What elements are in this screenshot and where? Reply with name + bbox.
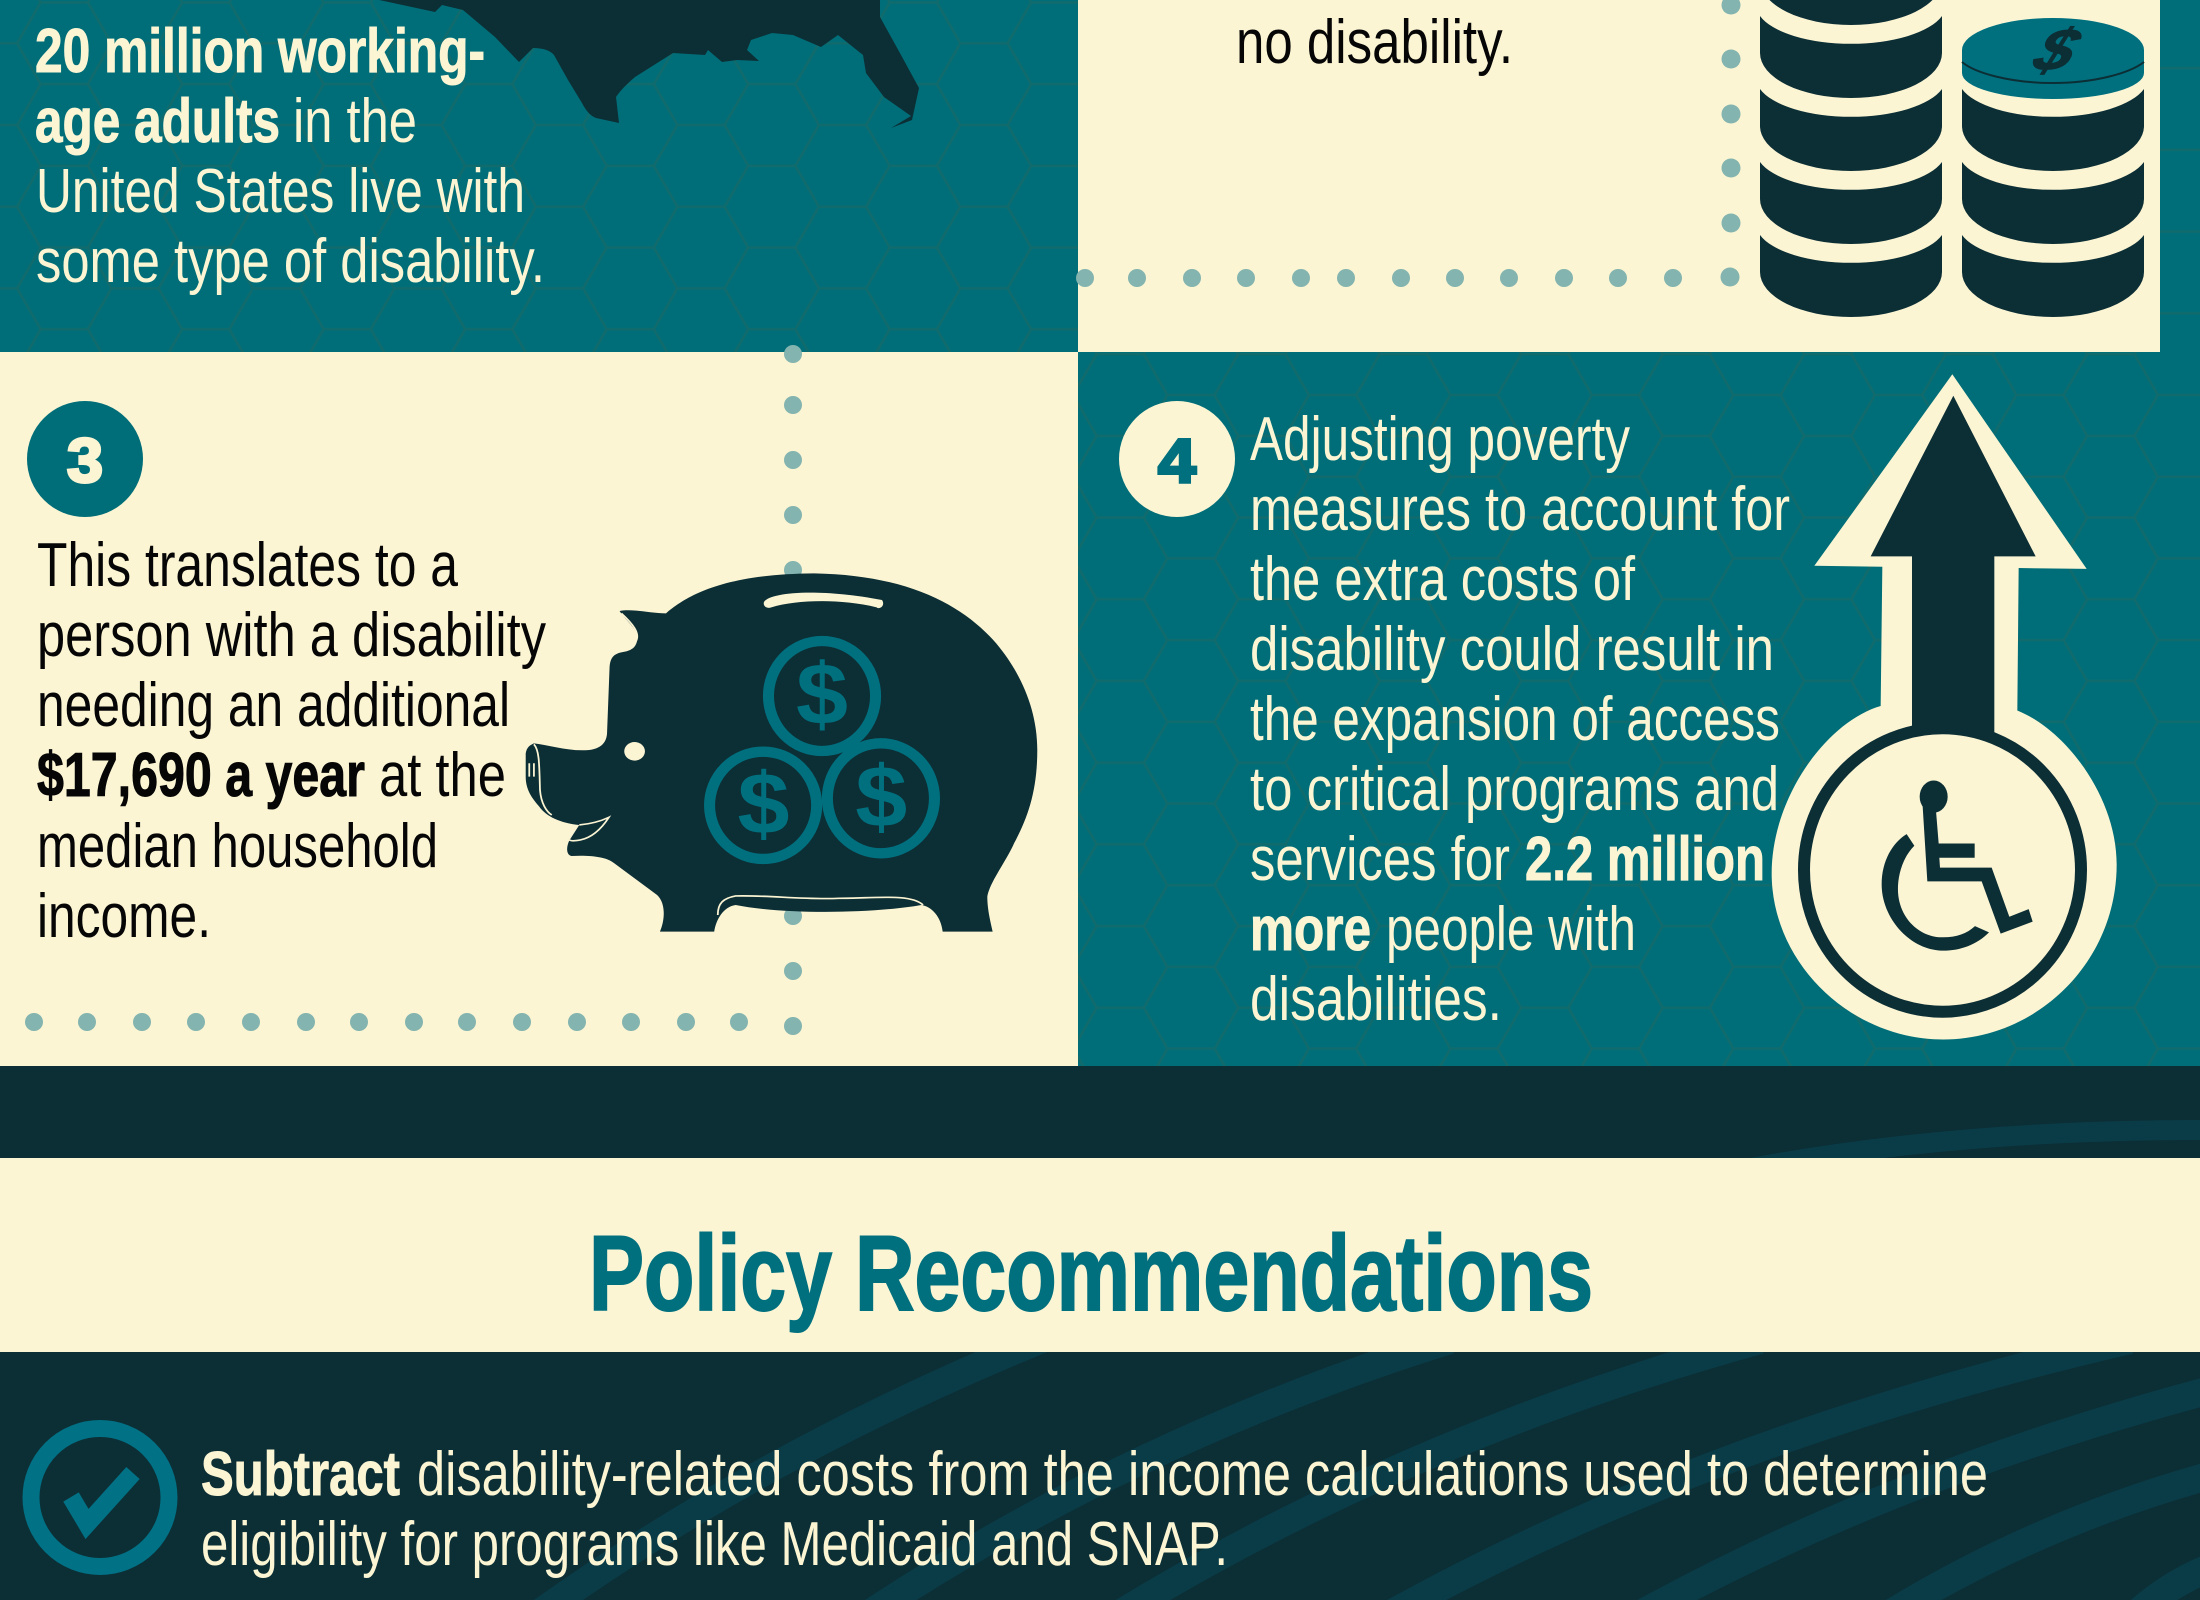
icon: piggy bank: $ [737, 755, 789, 853]
fact 3 text: needing an additional [37, 671, 510, 740]
fact 1 text: age adults [35, 87, 280, 156]
recommendation text [201, 1440, 1988, 1579]
fact 4 text: to critical programs and [1250, 755, 1779, 824]
panel: fact 1 [0, 0, 1078, 352]
fact 1 text: United States live with [36, 157, 525, 226]
icon: piggy bank: $ [796, 646, 848, 743]
fact 4 text [1250, 405, 1790, 1034]
fact 1 text [35, 17, 545, 296]
fact 4 text: the expansion of access [1250, 685, 1780, 754]
recommendation 1 [31, 1428, 1988, 1579]
icon: piggy bank [526, 573, 1037, 932]
dotted line [25, 345, 802, 1035]
number 3 badge [27, 401, 143, 517]
number 4 badge [1119, 401, 1235, 517]
fact 1 text: some type of disability. [36, 227, 545, 296]
fact 3 text: person with a disability [37, 601, 546, 670]
fact 3 text: $17,690 a year [37, 741, 365, 810]
panel: fact 3 [0, 345, 1078, 1066]
icon: check mark [31, 1428, 169, 1566]
fact 4 text: disabilities. [1250, 965, 1502, 1034]
fact 4 text: people with [1386, 895, 1636, 964]
fact 4 text: Adjusting poverty [1250, 405, 1630, 474]
panel: policy heading band [0, 1158, 2200, 1352]
dotted line [1076, 0, 1740, 287]
number 3 badge: 3 [67, 427, 103, 496]
number 4 badge: 4 [1158, 427, 1197, 496]
fact 1 text: 20 million working- [35, 17, 485, 86]
fact 3 text [37, 531, 546, 951]
icon: piggy bank: $ [855, 748, 907, 846]
heading: Policy Recommendations [589, 1213, 1593, 1333]
fact 4 text: services for [1250, 825, 1510, 894]
fact 4 text: 2.2 million [1525, 825, 1765, 894]
icon: coin stacks: $ [2024, 17, 2090, 83]
fact 3 text: income. [37, 882, 211, 951]
panel: fact 4 [1078, 352, 2200, 1066]
icon: upward arrow with wheelchair symbol [1772, 374, 2117, 1039]
fact 3 text: This translates to a [37, 531, 458, 600]
map of the United States [379, 0, 919, 128]
fact 1 text: in the [293, 87, 417, 156]
fact 4 text: the extra costs of [1250, 545, 1636, 614]
fact 4 text: measures to account for [1250, 475, 1790, 544]
panel: fact 2 [1076, 0, 2200, 352]
icon: coin stacks [1760, 0, 2144, 317]
fact 4 text: disability could result in [1250, 615, 1774, 684]
fact 3 text: median household [37, 812, 438, 881]
recommendation text: Subtract [201, 1440, 400, 1509]
fact 3 text: at the [379, 741, 506, 810]
panel: dark background with curved bands [0, 1066, 2200, 1600]
recommendation text: eligibility for programs like Medicaid and SNAP. [201, 1510, 1228, 1579]
fact 4 text: more [1250, 895, 1371, 964]
fact 2 text: no disability. [1236, 8, 1513, 77]
